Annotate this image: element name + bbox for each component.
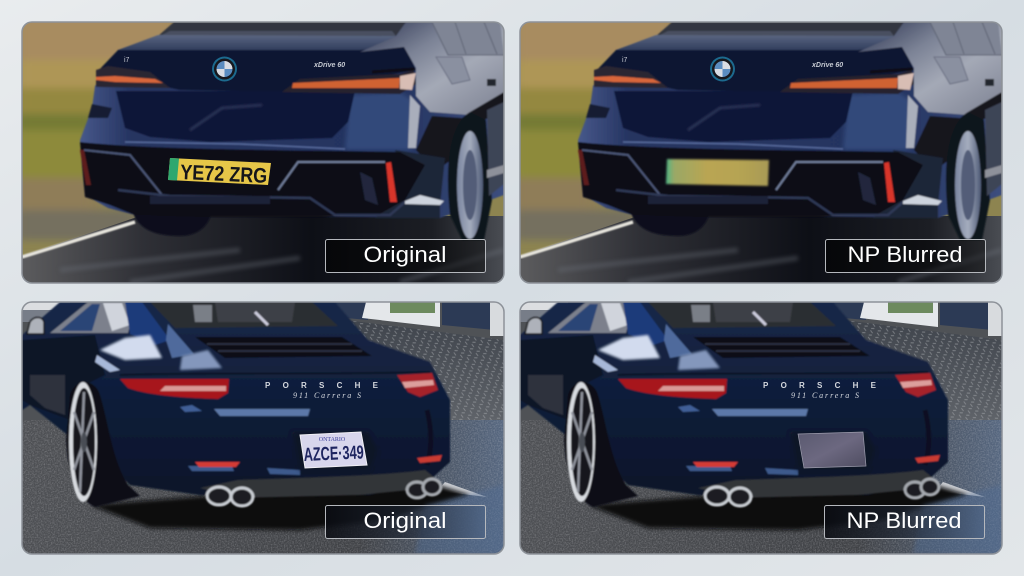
model badges: PORSCHE xyxy=(265,381,379,390)
model badges xyxy=(622,56,844,67)
model badges: i7 xyxy=(124,57,130,64)
model badges: xDrive 60 xyxy=(313,62,345,69)
number plate AZCE 349 xyxy=(300,432,367,468)
model badges xyxy=(124,56,346,67)
label: Original xyxy=(326,240,486,272)
panel: Porsche original xyxy=(22,302,504,554)
label: Original xyxy=(326,506,486,538)
label: Original: Original xyxy=(364,508,446,533)
label: NP Blurred: NP Blurred xyxy=(848,242,962,267)
panel: Porsche number plate blurred xyxy=(520,302,1002,554)
number plate YE72 ZRG: YE72 ZRG xyxy=(180,161,268,188)
blurred number plate xyxy=(798,432,866,468)
label: Original: Original xyxy=(364,242,446,267)
panel: BMW number plate blurred xyxy=(508,15,1002,283)
model badges: 911 Carrera S xyxy=(791,391,859,400)
blurred number plate xyxy=(666,159,769,186)
model badges: PORSCHE xyxy=(763,381,877,390)
label: NP Blurred: NP Blurred xyxy=(846,508,962,533)
model badges xyxy=(764,382,876,398)
label: NP Blurred xyxy=(824,506,984,538)
panel: BMW original xyxy=(10,15,504,283)
model badges: i7 xyxy=(622,57,628,64)
number plate AZCE 349: ONTARIO xyxy=(319,437,346,443)
model badges: xDrive 60 xyxy=(811,62,843,69)
number plate AZCE 349: AZCE·349 xyxy=(303,442,364,466)
model badges xyxy=(266,382,378,398)
label: NP Blurred xyxy=(826,240,986,272)
model badges: 911 Carrera S xyxy=(293,391,361,400)
